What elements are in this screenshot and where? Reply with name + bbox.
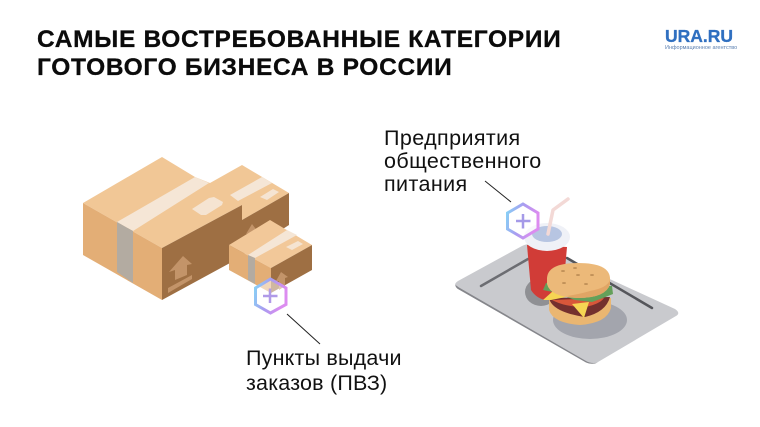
icon: plus hexagon, food bbox=[508, 204, 538, 238]
box top surfaces bbox=[83, 157, 289, 248]
logo: URA.RU: URA.RU bbox=[665, 26, 733, 46]
burger bbox=[549, 298, 611, 325]
icon: tray with drink and burger bbox=[455, 199, 678, 364]
big box right face and back box face bbox=[162, 193, 289, 300]
straw bbox=[548, 199, 568, 234]
label: catering: питания bbox=[384, 172, 468, 196]
leader line: boxes bbox=[287, 314, 320, 344]
icon: cardboard boxes bbox=[83, 157, 312, 300]
title: САМЫЕ ВОСТРЕБОВАННЫЕ КАТЕГОРИИ bbox=[37, 26, 561, 53]
title bbox=[37, 26, 561, 81]
label: pickup points: Пункты выдачи bbox=[246, 346, 402, 370]
labels on the boxes bbox=[192, 197, 223, 215]
leader line: food bbox=[485, 181, 511, 202]
label: pickup points bbox=[246, 346, 402, 395]
label: catering: общественного bbox=[384, 149, 542, 173]
label: pickup points: заказов (ПВЗ) bbox=[246, 371, 387, 395]
logo: URA.RU: Информационное агентство bbox=[665, 45, 737, 51]
tray bbox=[455, 244, 678, 364]
title: ГОТОВОГО БИЗНЕСА В РОССИИ bbox=[37, 54, 452, 81]
burger shadow bbox=[553, 301, 627, 339]
label: catering bbox=[384, 126, 542, 196]
cup shadow bbox=[525, 278, 557, 306]
big box arrow mark bbox=[169, 256, 192, 280]
tray slots bbox=[481, 259, 528, 286]
label: catering: Предприятия bbox=[384, 126, 521, 150]
big box tape bbox=[117, 177, 209, 231]
small box bbox=[229, 220, 312, 268]
cup bbox=[527, 245, 567, 300]
icon: plus hexagon, boxes bbox=[256, 279, 286, 313]
big box left face bbox=[83, 203, 162, 300]
